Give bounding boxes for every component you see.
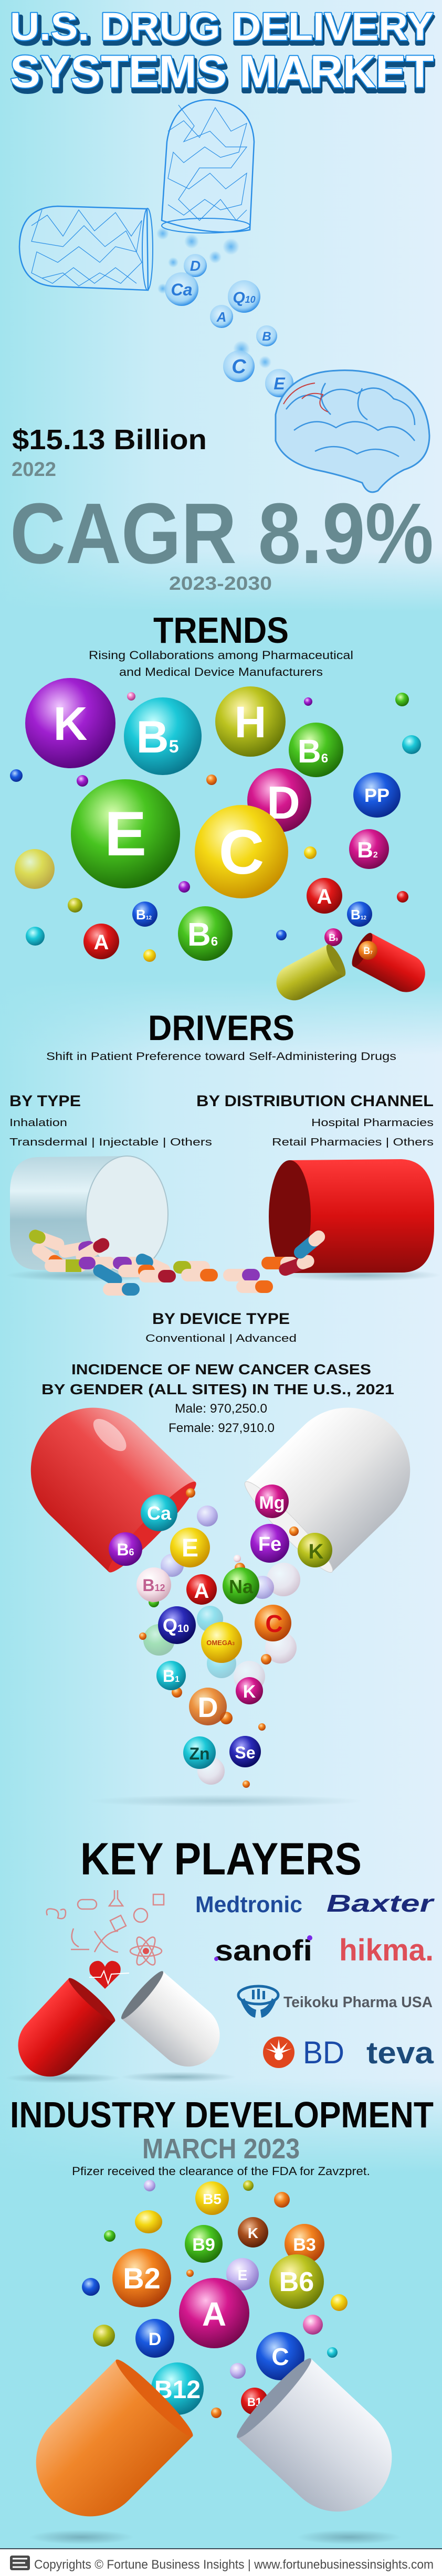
- market value: [12, 424, 207, 481]
- industry vitamin bubbles: [82, 2180, 348, 2418]
- trends heading: TRENDS: [153, 610, 289, 651]
- cancer capsules with vitamins: Se: [235, 1743, 256, 1762]
- trends vitamin bubbles: B12: [136, 907, 152, 923]
- key players heading: KEY PLAYERS: [80, 1834, 362, 1884]
- segment: by type: Inhalation: [9, 1117, 67, 1129]
- logo: hikma: hikma.: [339, 1933, 434, 1967]
- vitamin bubbles: D Ca Q10 A B C E: B: [262, 330, 271, 344]
- trends vitamin bubbles: B6: [187, 917, 218, 953]
- brain: [276, 370, 429, 492]
- cancer capsules with vitamins: B12: [142, 1576, 165, 1595]
- cancer capsules with vitamins: Mg: [259, 1493, 285, 1513]
- vitamin bubbles: D Ca Q10 A B C E: A: [216, 309, 226, 325]
- segment: by type: [9, 1093, 212, 1148]
- industry vitamin bubbles: A: [202, 2295, 226, 2333]
- drivers capsules with spilled pills: [5, 1156, 441, 1296]
- trends capsule halves: [270, 930, 432, 1006]
- trends vitamin bubbles: PP: [364, 785, 390, 806]
- segment: by type: Transdermal | Injectable | Others: [9, 1137, 212, 1148]
- industry vitamin bubbles: C: [271, 2343, 289, 2370]
- cancer capsules with vitamins: OMEGA3: [206, 1639, 235, 1647]
- industry vitamin bubbles: K: [248, 2225, 258, 2241]
- drivers heading: DRIVERS: [148, 1008, 294, 1048]
- trends heading: Rising Collaborations among Pharmaceutical: [89, 649, 353, 662]
- cancer capsules with vitamins: K: [243, 1682, 256, 1702]
- industry vitamin bubbles: B9: [192, 2235, 215, 2255]
- trends vitamin bubbles: B5: [136, 712, 179, 762]
- segment: by distribution channel: BY DISTRIBUTION CHANNEL: [196, 1093, 434, 1110]
- industry development heading: MARCH 2023: [142, 2133, 300, 2165]
- cancer capsules with vitamins: Na: [229, 1576, 254, 1597]
- segment: by type: BY TYPE: [9, 1093, 81, 1110]
- logo: Teikoku Pharma USA: Teikoku Pharma USA: [283, 1994, 433, 2011]
- cancer incidence stat: INCIDENCE OF NEW CANCER CASES: [71, 1361, 371, 1377]
- industry vitamin bubbles: B2: [123, 2262, 161, 2295]
- vitamin bubbles: D Ca Q10 A B C E: Ca: [171, 280, 192, 299]
- trends vitamin bubbles: E: [104, 799, 146, 869]
- cancer incidence stat: BY GENDER (ALL SITES) IN THE U.S., 2021: [41, 1381, 394, 1397]
- trends vitamin bubbles: [10, 678, 421, 962]
- segment: by device type: BY DEVICE TYPE: [152, 1310, 290, 1328]
- trends vitamin bubbles: B2: [357, 838, 378, 862]
- industry vitamin bubbles: B3: [293, 2235, 316, 2255]
- cancer capsules with vitamins: E: [182, 1534, 198, 1562]
- cancer incidence stat: [41, 1361, 394, 1435]
- trends heading: [89, 610, 353, 679]
- cancer capsules with vitamins: B6: [117, 1540, 134, 1559]
- trends vitamin bubbles: A: [94, 931, 109, 954]
- industry vitamin bubbles: B12: [154, 2376, 201, 2404]
- segment: by distribution channel: Retail Pharmacies | Others: [272, 1137, 434, 1148]
- drivers heading: [46, 1008, 396, 1063]
- industry development heading: Pfizer received the clearance of the FDA for Zavzpret.: [72, 2165, 370, 2178]
- CAGR: 2023-2030: [169, 573, 272, 594]
- title: SYSTEMS MARKET: [10, 47, 434, 97]
- logo: teva: teva: [366, 2036, 434, 2070]
- title: [10, 5, 434, 101]
- glow dots: [156, 227, 271, 368]
- vitamin bubbles: D Ca Q10 A B C E: D: [190, 258, 201, 274]
- trends vitamin bubbles: B9: [329, 932, 338, 943]
- segment: by device type: [145, 1310, 297, 1344]
- cancer capsules with vitamins: C: [265, 1610, 283, 1637]
- logo: Teikoku Pharma USA: [238, 1986, 433, 2018]
- cancer capsules with vitamins: [5, 1382, 436, 1807]
- vitamin bubbles: D Ca Q10 A B C E: Q10: [233, 289, 256, 306]
- trends vitamin bubbles: B12: [351, 907, 366, 923]
- segment: by distribution channel: [196, 1093, 434, 1148]
- trends vitamin bubbles: C: [219, 817, 264, 887]
- icon: heart with pulse: [89, 1961, 121, 1989]
- market value: 2022: [12, 459, 56, 481]
- industry vitamin bubbles: B5: [203, 2191, 222, 2207]
- logo: Baxter: Baxter: [327, 1890, 435, 1917]
- trends vitamin bubbles: K: [54, 698, 87, 750]
- vitamin bubbles: D Ca Q10 A B C E: [165, 254, 293, 397]
- cancer capsules with vitamins: Zn: [189, 1744, 210, 1763]
- drivers heading: Shift in Patient Preference toward Self-Administering Drugs: [46, 1051, 396, 1063]
- industry vitamin bubbles: B1: [247, 2395, 262, 2409]
- title: U.S. DRUG DELIVERY: [13, 8, 434, 52]
- cancer capsules with vitamins: K: [309, 1540, 324, 1563]
- industry vitamin bubbles: D: [149, 2329, 161, 2349]
- medical icons: [47, 1890, 164, 1967]
- logo: BD: BD: [303, 2035, 344, 2070]
- market value: $15.13 Billion: [12, 424, 207, 455]
- title: SYSTEMS MARKET: [13, 51, 434, 101]
- key players illustration: capsule with medical icons: [5, 1890, 236, 2090]
- vitamin bubbles: D Ca Q10 A B C E: E: [273, 374, 286, 393]
- cancer capsules with vitamins: D: [197, 1692, 218, 1723]
- vitamin bubbles: D Ca Q10 A B C E: C: [231, 356, 246, 378]
- trends vitamin bubbles: D: [267, 777, 300, 829]
- trends capsule halves: B7: [363, 946, 373, 956]
- cancer capsules with vitamins: A: [194, 1579, 209, 1603]
- trends vitamin bubbles: H: [235, 697, 266, 747]
- cancer incidence stat: Female: 927,910.0: [169, 1421, 275, 1435]
- trends vitamin bubbles: B6: [298, 734, 328, 770]
- cancer capsules with vitamins: Ca: [147, 1502, 172, 1524]
- wireframe capsule: horizontal: [19, 206, 153, 290]
- segment: by distribution channel: Hospital Pharmacies: [311, 1117, 434, 1129]
- industry capsules: [14, 2354, 414, 2545]
- logo: Medtronic: Medtronic: [195, 1892, 302, 1917]
- mini pills: [27, 1228, 328, 1296]
- industry vitamin bubbles: B6: [279, 2267, 314, 2297]
- segment: by device type: Conventional | Advanced: [145, 1333, 297, 1344]
- icon: fortune business insights logo: [10, 2556, 30, 2570]
- title: U.S. DRUG DELIVERY: [10, 5, 434, 48]
- industry development heading: [10, 2094, 434, 2178]
- logo: sanofi: sanofi: [215, 1934, 312, 1967]
- cancer capsules with vitamins: B1: [163, 1667, 180, 1685]
- trends heading: and Medical Device Manufacturers: [119, 665, 323, 679]
- cancer capsules with vitamins: Q10: [163, 1615, 189, 1636]
- industry vitamin bubbles: E: [238, 2267, 247, 2283]
- logo: BD: [263, 2035, 344, 2070]
- trends vitamin bubbles: A: [317, 885, 332, 908]
- wireframe capsule: vertical: [162, 100, 254, 233]
- hero illustration: wireframe capsules with vitamins flowing to brain: [19, 100, 429, 492]
- cancer incidence stat: Male: 970,250.0: [175, 1402, 267, 1416]
- cancer capsules with vitamins: Fe: [258, 1533, 281, 1555]
